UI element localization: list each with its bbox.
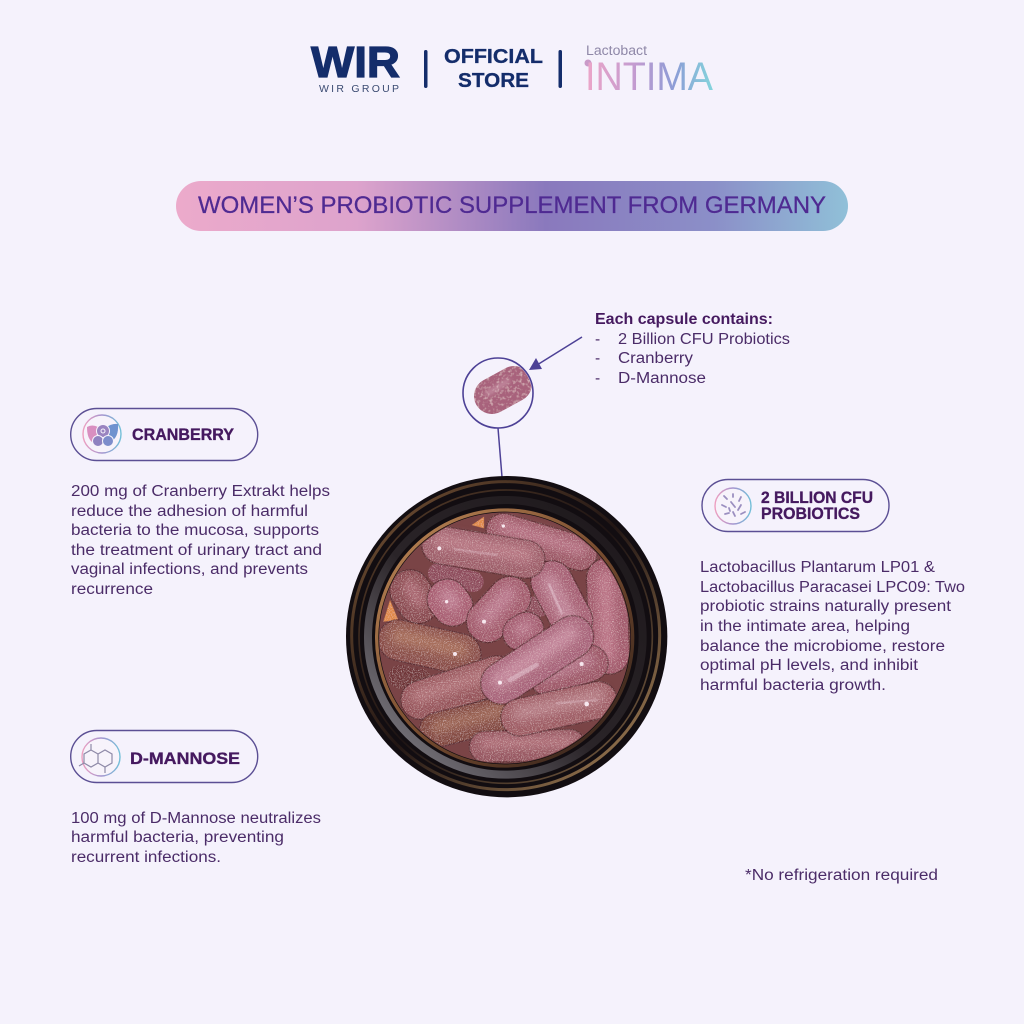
capsule contents list: 2 Billion CFU Probiotics [618,331,790,348]
divider right [558,50,562,88]
title banner: WOMEN’S PROBIOTIC SUPPLEMENT FROM GERMANY [198,192,826,219]
probiotics badge: PROBIOTICS [761,505,860,523]
connector line [498,428,502,477]
capsule contents list: D-Mannose [618,370,706,387]
footnote: *No refrigeration required [745,867,938,884]
cranberry badge: CRANBERRY [132,426,234,444]
cranberry description [71,483,330,598]
icon: molecule [79,738,120,776]
probiotics description: optimal pH levels, and inhibit [700,657,919,674]
probiotics description: Lactobacillus Paracasei LPC09: Two [700,579,965,596]
panel: cranberry [71,408,330,598]
icon: bacteria [715,488,751,524]
icon: berries [83,415,121,453]
probiotics badge [702,480,889,532]
cranberry description: recurrence [71,581,153,598]
capsule magnifier [463,358,533,428]
logo: Lactobact Intima: INTIMA [585,55,713,99]
cranberry description: reduce the adhesion of harmful [71,503,308,520]
probiotics description [700,559,965,694]
capsule contents list: Cranberry [618,350,693,367]
divider left [424,50,428,88]
logo: WIR Group: WIR [311,38,400,87]
capsule contents list [595,311,790,387]
title banner [176,181,848,231]
capsule contents list: - [595,370,600,387]
probiotics description: Lactobacillus Plantarum LP01 & [700,559,936,576]
d-mannose description [71,810,321,866]
cranberry description: 200 mg of Cranberry Extrakt helps [71,483,330,500]
capsules [383,517,609,747]
d-mannose badge [71,730,258,782]
cranberry badge [71,408,258,460]
official store label: STORE [458,69,529,92]
probiotics description: harmful bacteria growth. [700,677,886,694]
logo: WIR Group: WIR GROUP [319,83,399,95]
d-mannose description: recurrent infections. [71,849,221,866]
official store label [444,45,543,92]
jar rim [346,476,667,797]
probiotics badge: 2 BILLION CFU [761,489,873,507]
d-mannose description: harmful bacteria, preventing [71,829,284,846]
official store label: OFFICIAL [444,45,543,68]
panel: probiotics [700,480,965,694]
d-mannose description: 100 mg of D-Mannose neutralizes [71,810,321,827]
capsule contents list: - [595,331,600,348]
header logos [311,38,713,99]
cranberry description: vaginal infections, and prevents [71,561,308,578]
logo: Lactobact Intima: Lactobact [586,43,647,58]
capsule contents list: Each capsule contains: [595,311,773,328]
probiotics description: balance the microbiome, restore [700,638,945,655]
arrow to capsule [529,337,582,370]
cranberry description: the treatment of urinary tract and [71,542,322,559]
cranberry description: bacteria to the mucosa, supports [71,522,319,539]
jar with capsules [346,476,667,797]
capsule highlights [437,524,597,706]
capsule contents list: - [595,350,600,367]
probiotics description: in the intimate area, helping [700,618,910,635]
d-mannose badge: D-MANNOSE [130,750,240,768]
probiotics description: probiotic strains naturally present [700,598,952,615]
panel: d-mannose [71,730,321,866]
